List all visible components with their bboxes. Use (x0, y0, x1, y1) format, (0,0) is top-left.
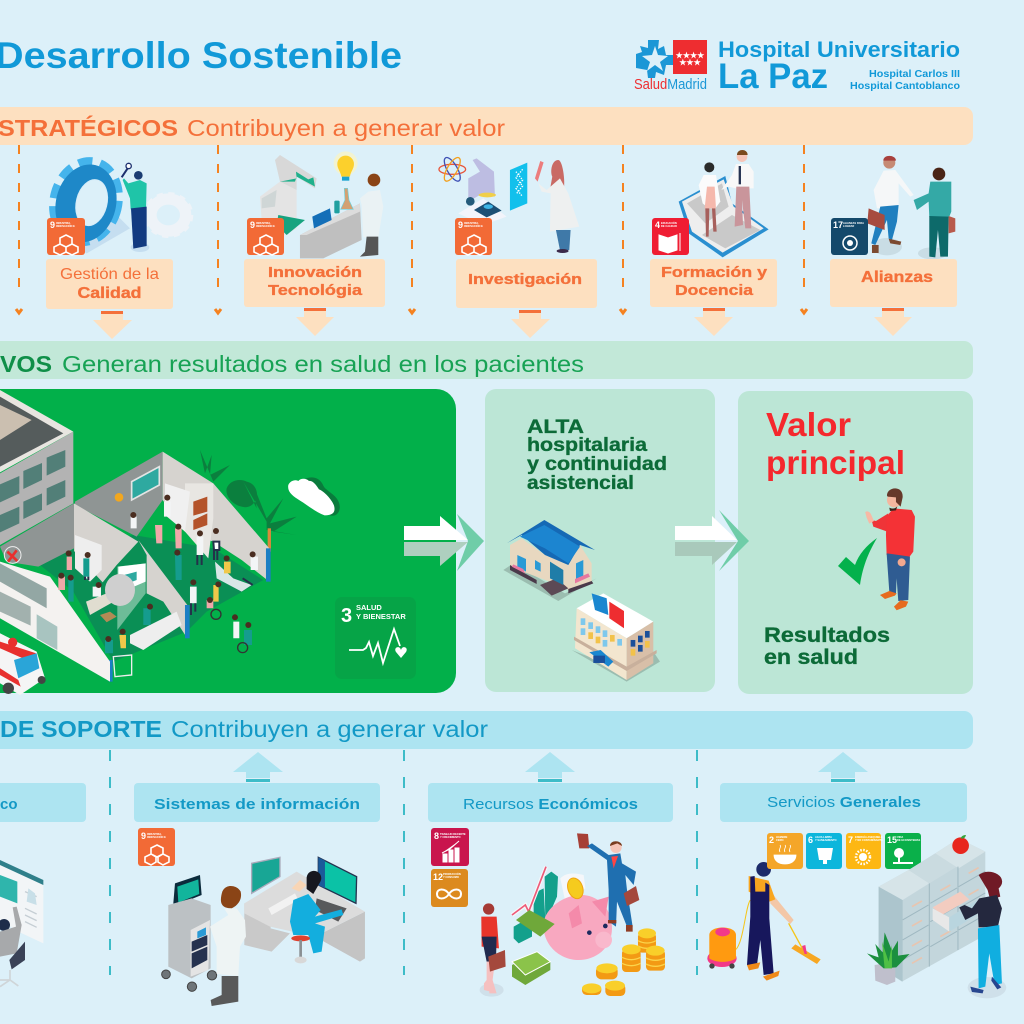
SDG badge 9: research: INDUSTRIA, (464, 221, 479, 225)
SDG badge 4: EDUCACIÓN (661, 220, 677, 225)
label box: Formación y Docencia: Formación y (661, 264, 768, 281)
label box: partial left: co (0, 796, 18, 813)
SDG 6: Y SANEAMIENTO (815, 838, 837, 842)
icon: hospital building (572, 593, 660, 682)
illustration: woman with briefcase (480, 903, 506, 997)
SDG badge 8: Y CRECIMIENTO (440, 835, 461, 839)
SDG 2: 2 (769, 835, 774, 845)
label box: Gestión de la Calidad (46, 259, 173, 309)
label box: Alianzas: Alianzas (861, 269, 933, 286)
logo text: SaludMadrid: SaludMadrid (634, 76, 707, 93)
SDG 6: AGUA LIMPIA (815, 835, 832, 839)
text: y continuidad: y continuidad (527, 454, 667, 475)
ambulance (0, 633, 45, 695)
label box: Alianzas (830, 259, 957, 307)
logo text: Hospital Carlos III: Hospital Carlos III (869, 69, 960, 80)
illustration: quality gears and person (45, 154, 191, 253)
heading band: de soporte (0, 711, 973, 749)
icon: Madrid flag: ★★★★ (676, 51, 705, 60)
arrow: green panel to discharge (404, 514, 484, 571)
businessman (610, 842, 622, 853)
walls (0, 503, 74, 567)
chart bars behind (514, 920, 532, 943)
logo text: Hospital Universitario: Hospital Universitario (718, 37, 960, 62)
SDG badge 17: 17 (833, 220, 843, 230)
illustration: research microscope and scientist (439, 155, 579, 253)
label box: Servicios Generales: Servicios Generales (767, 794, 921, 811)
SDG badge 9: sistemas: INNOVACIÓN E (147, 834, 166, 839)
label box: Innovación Tecnológia: Innovación (268, 264, 362, 281)
illustration: information systems desk (162, 857, 365, 1006)
heading: principal: principal (766, 444, 905, 481)
SDG badge 12 (431, 869, 468, 907)
illustration: filing cabinets, plant and woman (867, 835, 1006, 998)
SDG badge 9: innovation: INDUSTRIA, (256, 221, 271, 225)
icon: Madrid flag (673, 40, 707, 74)
dashed orange dividers (16, 145, 807, 313)
label box: Innovación Tecnológia: Tecnológia (268, 282, 363, 299)
illustration: partial left doctor at screen (0, 860, 43, 987)
label box: Investigación (456, 259, 597, 308)
label box: Gestión de la Calidad: Calidad (78, 285, 142, 302)
arrow down (93, 311, 132, 339)
illustration: alliance handshake (867, 156, 955, 259)
heading band: operativos: Generan resultados en salud en los pacientes (62, 351, 584, 377)
label box: Investigación: Investigación (468, 271, 582, 288)
heading band: operativos (0, 341, 973, 379)
SDG 2: HAMBRE (776, 835, 788, 839)
SDG 7 (846, 833, 883, 869)
coin stacks (582, 933, 665, 996)
SDG 15: 15 (887, 835, 897, 845)
SDG 6: 6 (808, 835, 813, 845)
SDG badge 17: ALIANZAS PARA (843, 221, 864, 225)
icon: house (503, 520, 597, 601)
white front facade (0, 562, 110, 682)
icon: check mark (838, 538, 877, 585)
SDG badge 3: SALUD (356, 603, 382, 612)
text: en salud: en salud (764, 646, 858, 669)
label box: Sistemas de información: Sistemas de información (154, 796, 360, 813)
SDG badge 8: TRABAJO DECENTE (440, 832, 466, 836)
logo text: Hospital Cantoblanco: Hospital Cantoblanco (850, 81, 960, 92)
plants behind rooms (200, 450, 297, 535)
SDG 15 (885, 833, 921, 869)
cloud (305, 477, 340, 516)
label box: Gestión de la Calidad: Gestión de la (60, 266, 159, 283)
logo text: La Paz: La Paz (718, 57, 828, 96)
arrow up: servicios (818, 752, 868, 782)
panel: valor principal (738, 391, 973, 694)
SDG 7: 7 (848, 835, 853, 845)
illustration: innovation lab (260, 151, 383, 258)
label box: Recursos Económicos (428, 783, 673, 822)
label box: Recursos Económicos: Recursos Económicos (463, 796, 638, 813)
heading band: de soporte: Contribuyen a generar valor (171, 716, 488, 742)
panel: alta hospitalaria (485, 389, 715, 692)
icon: blue cross with star (636, 40, 673, 78)
heading band: estratégicos (0, 107, 973, 145)
label box: Sistemas de información (134, 783, 380, 822)
arrow down (694, 308, 733, 336)
arrow down (296, 308, 334, 336)
label box: Servicios Generales (720, 783, 967, 822)
SDG 2 (767, 833, 803, 869)
SDG badge 9: quality: INDUSTRIA, (56, 221, 71, 225)
SDG badge 3: 3 (341, 605, 352, 627)
SDG badge 8: 8 (434, 831, 439, 841)
SDG badge 9: quality: INNOVACIÓN E (56, 223, 75, 228)
SDG badge 9: sistemas (138, 828, 175, 866)
text: resultados: Resultados (764, 624, 890, 647)
panel: green hospital (0, 389, 456, 695)
SDG badge 12: Y CONSUMO (443, 875, 459, 879)
label box: Formación y Docencia: Docencia (675, 282, 754, 299)
illustration: training book and doctors (679, 150, 769, 257)
SDG badge 9: research (455, 218, 492, 255)
SDG badge 3 (335, 597, 416, 679)
SDG 6 (806, 833, 842, 869)
cash (516, 910, 555, 937)
piggy (544, 895, 612, 960)
dashed teal dividers (110, 750, 697, 975)
SDG 15: DE ECOSISTEMAS (897, 838, 920, 842)
SDG badge 9: quality: 9 (50, 220, 55, 230)
SDG badge 4 (652, 218, 689, 255)
floor (40, 535, 263, 662)
text: asistencial: asistencial (527, 473, 634, 494)
icon: Madrid flag: ★★★ (679, 58, 702, 67)
people (58, 495, 258, 653)
tower (0, 390, 73, 472)
illustration: man in red sweater (865, 488, 915, 610)
label box: partial left (0, 783, 86, 822)
heading band: operativos: VOS (0, 351, 52, 377)
SDG badge 9: innovation (247, 218, 284, 255)
SDG badge 9: sistemas: INDUSTRIA, (147, 832, 162, 836)
SDG badge 8 (431, 828, 469, 866)
SDG 2: CERO (776, 838, 784, 842)
heading band: estratégicos: Contribuyen a generar valor (187, 115, 505, 141)
arrow up: recursos (525, 752, 575, 782)
SDG badges: 2, 6, 7, 15 (767, 833, 921, 869)
SDG badge 9: research: 9 (458, 220, 463, 230)
screens and boards (132, 467, 159, 500)
SDG badge 9: innovation: INNOVACIÓN E (256, 223, 275, 228)
SDG badge 9: sistemas: 9 (141, 831, 146, 841)
heading: alta: ALTA (527, 417, 584, 438)
SDG 15: VIDA (897, 835, 903, 839)
illustration: cleaner with vacuum and mop (707, 862, 821, 981)
illustration: hospital building (0, 390, 340, 695)
arrow up: sistemas (233, 752, 283, 782)
label box: Formación y Docencia (650, 259, 777, 307)
title: Desarrollo Sostenible (0, 35, 402, 76)
SDG badge 4: DE CALIDAD (661, 224, 677, 228)
SDG badge 12: PRODUCCIÓN (443, 871, 461, 876)
SDG badge 9: quality (47, 218, 85, 255)
arrow down (511, 310, 550, 338)
beds and machines (130, 612, 182, 650)
heading: valor: Valor (766, 406, 851, 443)
label box: Innovación Tecnológia (244, 259, 385, 307)
SDG 7: ENERGÍA ASEQUIBLE (855, 834, 883, 839)
SDG badge 12: 12 (433, 872, 443, 882)
SDG badge 17 (831, 218, 868, 255)
SDG badge 9: research: INNOVACIÓN E (464, 223, 483, 228)
illustration: economic resources piggy bank (512, 833, 665, 996)
logo: SaludMadrid and Hospital La Paz (634, 37, 960, 96)
heading band: de soporte: DE SOPORTE (0, 716, 162, 742)
SDG badge 17: LOGRAR (843, 224, 854, 228)
SDG badge 3: Y BIENESTAR (356, 612, 406, 621)
arrow down (874, 308, 912, 336)
heading band: estratégicos: STRATÉGICOS (0, 114, 178, 141)
SDG badge 4: 4 (655, 220, 660, 230)
SDG 7: Y NO CONTAMINANTE (855, 838, 883, 842)
arrow: discharge to value (675, 510, 749, 571)
SDG badge 9: innovation: 9 (250, 220, 255, 230)
text: hospitalaria: hospitalaria (527, 435, 647, 456)
